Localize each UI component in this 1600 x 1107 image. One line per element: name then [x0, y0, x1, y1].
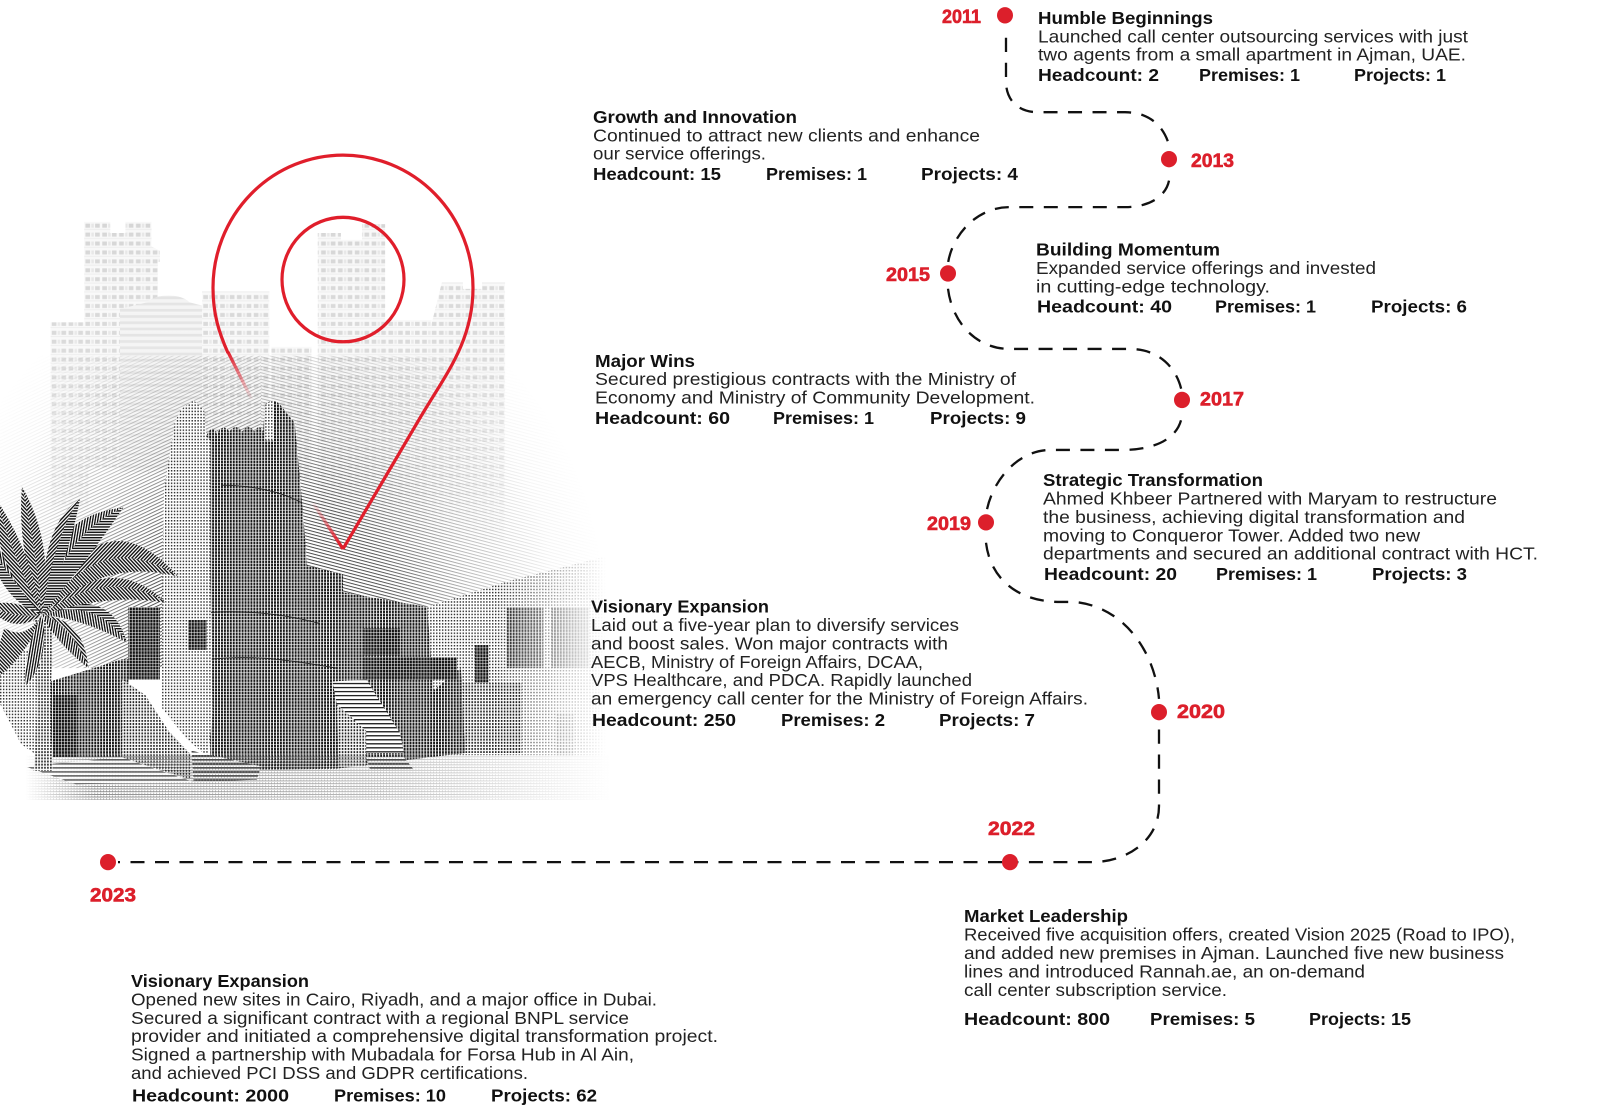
stats: Headcount: 2 [1038, 65, 1159, 85]
building behind palm [50, 659, 128, 757]
dashed timeline path [118, 38, 1182, 862]
description: Received five acquisition offers, created Vision 2025 (Road to IPO), [964, 925, 1515, 945]
node 2023 [100, 854, 116, 870]
stats: Premises: 5 [1150, 1009, 1255, 1029]
description: in cutting-edge technology. [1036, 276, 1270, 296]
node 2015 [940, 265, 956, 282]
right lit building [427, 558, 600, 756]
stats: Headcount: 15 [593, 164, 721, 184]
year 2013: 2013 [1191, 151, 1234, 172]
stats: Headcount: 250 [592, 710, 736, 730]
description [595, 369, 1035, 408]
palm trunk [34, 619, 53, 771]
porch shadow [364, 628, 400, 656]
year 2015: 2015 [886, 265, 930, 286]
stats [964, 1009, 1411, 1029]
stats [1037, 297, 1467, 317]
node 2013 [1161, 151, 1177, 167]
stats: Premises: 1 [766, 164, 867, 184]
description: VPS Healthcare, and PDCA. Rapidly launched [591, 670, 972, 690]
stats: Headcount: 60 [595, 408, 730, 428]
description: an emergency call center for the Ministry of Foreign Affairs. [591, 688, 1088, 709]
description: call center subscription service. [964, 980, 1227, 1000]
timeline nodes [100, 7, 1190, 870]
panel: 2013 Growth and Innovation [593, 107, 1018, 184]
node 2017 [1174, 392, 1190, 408]
fort lower right block [463, 683, 522, 753]
description: departments and secured an additional contract with HCT. [1043, 543, 1538, 564]
engraved sky hatch [0, 356, 567, 668]
stats: Premises: 1 [1215, 297, 1316, 317]
description: Expanded service offerings and invested [1036, 258, 1376, 278]
year 2020: 2020 [1177, 702, 1225, 723]
description: two agents from a small apartment in Ajman, UAE. [1038, 45, 1466, 65]
left staircase [122, 679, 192, 780]
panel: 2015 Building Momentum [1036, 239, 1467, 317]
description [591, 615, 1088, 709]
stats: Headcount: 800 [964, 1009, 1110, 1029]
stats [1044, 564, 1467, 584]
panel: 2020 Visionary Expansion [591, 597, 1088, 730]
heading: Strategic Transformation [1043, 470, 1263, 490]
right staircase [333, 679, 404, 753]
description [593, 125, 980, 164]
description [131, 989, 718, 1083]
stats: Projects: 9 [930, 408, 1026, 428]
description [964, 925, 1515, 1000]
year labels [90, 7, 1244, 906]
palm fronds [0, 487, 178, 686]
description: our service offerings. [593, 144, 766, 164]
stats: Premises: 1 [1199, 65, 1300, 85]
stats: Projects: 15 [1309, 1009, 1411, 1029]
year 2023: 2023 [90, 885, 136, 906]
palm tree [0, 487, 178, 771]
dark block behind palm [128, 607, 160, 680]
stats: Premises: 10 [334, 1085, 446, 1105]
stats: Premises: 1 [1216, 564, 1317, 584]
stats: Projects: 7 [939, 710, 1035, 730]
description: moving to Conqueror Tower. Added two new [1043, 525, 1420, 545]
panel: 2019 Strategic Transformation [1043, 470, 1538, 584]
heading: Market Leadership [964, 906, 1128, 926]
description: Secured a significant contract with a regional BNPL service [131, 1008, 629, 1028]
tower band lines [210, 485, 337, 668]
description: the business, achieving digital transformation and [1043, 507, 1465, 527]
front steps [25, 757, 194, 784]
description: AECB, Ministry of Foreign Affairs, DCAA, [591, 652, 923, 672]
stats: Premises: 1 [773, 408, 874, 428]
heading: Visionary Expansion [131, 971, 309, 991]
stats: Projects: 1 [1354, 65, 1446, 85]
stats: Headcount: 20 [1044, 564, 1177, 584]
stats: Projects: 3 [1372, 564, 1467, 584]
description [1036, 258, 1376, 296]
description: Secured prestigious contracts with the Ministry of [595, 369, 1016, 389]
year 2017: 2017 [1200, 389, 1244, 411]
description: Economy and Ministry of Community Development. [595, 387, 1035, 408]
description: and added new premises in Ajman. Launched five new business [964, 943, 1504, 963]
description: Laid out a five-year plan to diversify services [591, 615, 959, 635]
panel: 2022 Market Leadership [964, 906, 1515, 1029]
description: lines and introduced Rannah.ae, an on-demand [964, 961, 1365, 981]
year 2022: 2022 [988, 819, 1035, 840]
icon: red map pin [213, 155, 473, 549]
description: Signed a partnership with Mubadala for Forsa Hub in Al Ain, [131, 1044, 634, 1065]
stats: Headcount: 2000 [132, 1085, 289, 1105]
description: and achieved PCI DSS and GDPR certifications. [131, 1063, 528, 1083]
panel: 2017 Major Wins [595, 351, 1035, 428]
stats [593, 164, 1018, 184]
stats: Headcount: 40 [1037, 297, 1172, 317]
heading: Humble Beginnings [1038, 8, 1213, 28]
node 2011 [997, 7, 1013, 23]
fort lit tower face [162, 400, 213, 757]
node 2020 [1151, 704, 1167, 720]
stats: Projects: 6 [1371, 297, 1467, 317]
description: provider and initiated a comprehensive digital transformation project. [131, 1026, 718, 1046]
description [1038, 26, 1468, 65]
description: Continued to attract new clients and enhance [593, 125, 980, 145]
stats [132, 1085, 597, 1105]
heading: Growth and Innovation [593, 107, 797, 127]
tower window [188, 620, 207, 650]
stats: Projects: 62 [491, 1085, 597, 1105]
ground engraving [30, 755, 589, 800]
node 2019 [978, 514, 994, 531]
panel: 2011 Humble Beginnings [1038, 8, 1468, 85]
year 2019: 2019 [927, 514, 971, 535]
node 2022 [1002, 854, 1018, 870]
stats [595, 408, 1026, 428]
illustration: Ajman fort, palm and skyline [0, 222, 648, 800]
stats [1038, 65, 1446, 85]
stats: Projects: 4 [921, 164, 1018, 184]
panel: 2023 Visionary Expansion [131, 971, 718, 1105]
description [1043, 488, 1538, 564]
description: Ahmed Khbeer Partnered with Maryam to restructure [1043, 488, 1497, 509]
stats [592, 710, 1035, 730]
fort dark body [206, 401, 465, 771]
description: Opened new sites in Cairo, Riyadh, and a major office in Dubai. [131, 989, 657, 1010]
year 2011: 2011 [942, 7, 981, 28]
stats: Premises: 2 [781, 710, 885, 730]
fort awnings [363, 657, 457, 680]
description: and boost sales. Won major contracts with [591, 633, 948, 653]
heading: Visionary Expansion [591, 597, 769, 617]
heading: Building Momentum [1036, 239, 1220, 260]
skyline buildings [51, 222, 505, 543]
right turret highlight [264, 401, 274, 441]
heading: Major Wins [595, 351, 695, 371]
left lit wall [0, 650, 40, 757]
description: Launched call center outsourcing services with just [1038, 26, 1468, 46]
